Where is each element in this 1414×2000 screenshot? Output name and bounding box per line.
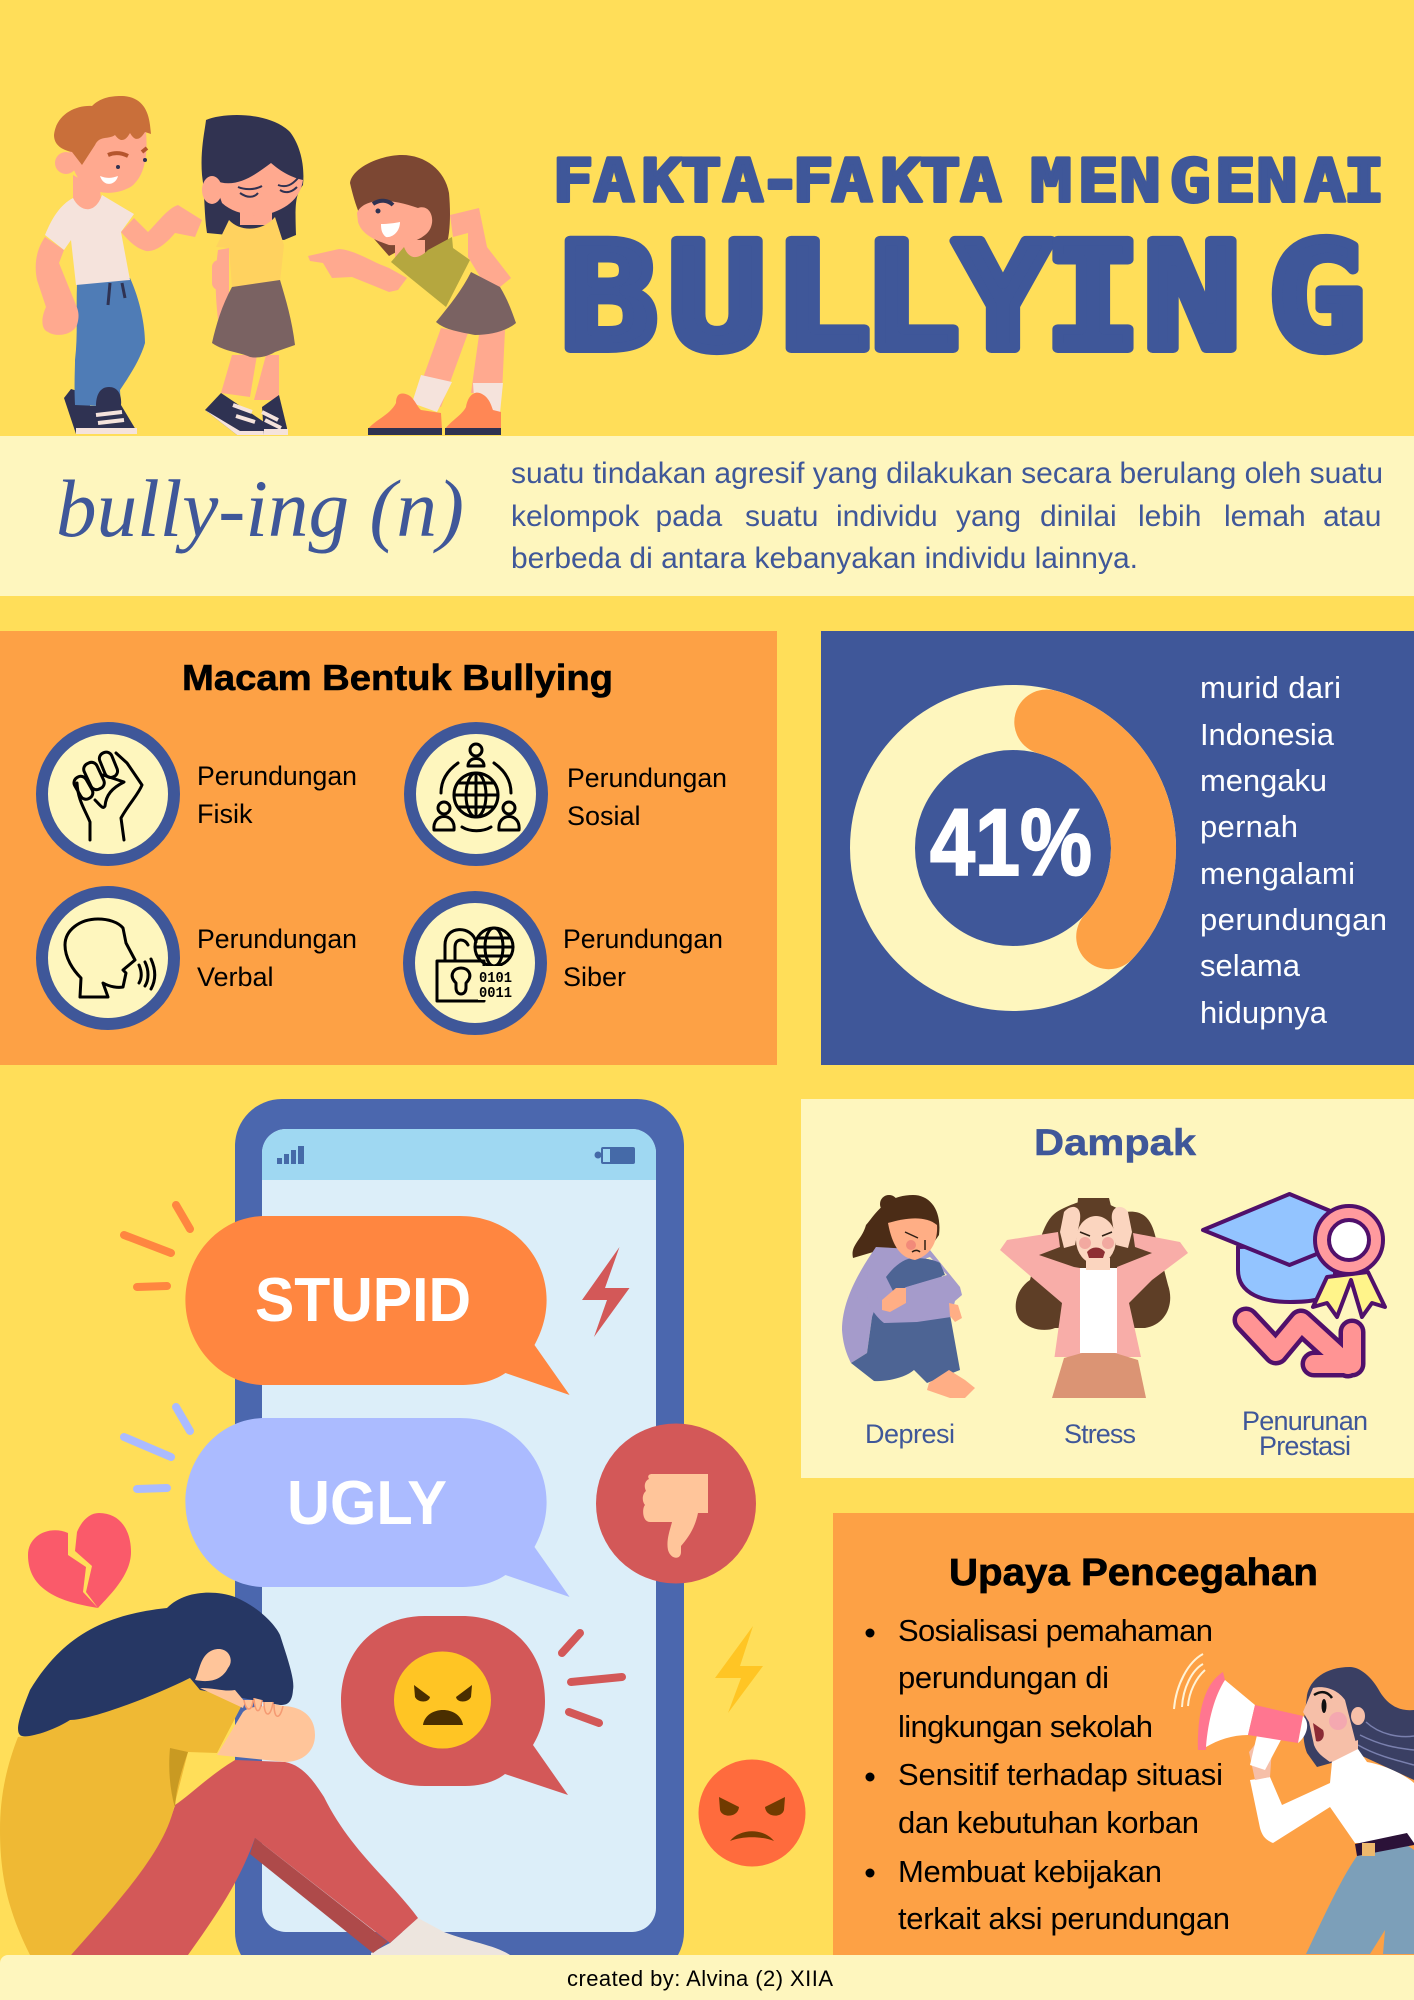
label: perundungan siber: Perundungan (563, 924, 723, 954)
heading: Dampak (1034, 1122, 1196, 1163)
label: perundungan fisik (197, 761, 357, 829)
definition text: individu (836, 500, 938, 533)
value: 41% (930, 790, 1092, 896)
panel: definition band (0, 436, 1414, 596)
bullet list: Sosialisasi pemahaman (898, 1613, 1213, 1648)
heading: Macam Bentuk Bullying (182, 657, 613, 698)
definition text (511, 457, 1383, 575)
speech bubble: angry emoji (341, 1616, 568, 1795)
definition text: lebih (1138, 500, 1201, 533)
label: perundungan verbal: Perundungan (197, 924, 357, 954)
definition text: suatu tindakan agresif yang dilakukan secara berulang oleh suatu (511, 457, 1383, 490)
label: penurunan prestasi: Prestasi (1259, 1431, 1351, 1461)
label: penurunan prestasi: Penurunan (1242, 1406, 1368, 1436)
statistic description: mengalami (1200, 856, 1355, 891)
statistic description: Indonesia (1200, 717, 1335, 752)
bullet list (866, 1613, 1230, 1936)
definition text: yang (956, 500, 1021, 533)
icon: speaking head (42, 892, 174, 1024)
statistic description: mengaku (1200, 763, 1327, 798)
figure: sad girl with dark hair (202, 115, 303, 435)
icon: lock and binary: 0011 (479, 985, 512, 1002)
definition text: pada (656, 500, 723, 533)
statistic description (1200, 670, 1387, 1030)
icon: yellow lightning (715, 1626, 763, 1713)
footer band (0, 1955, 1414, 2000)
icon: lock and binary (409, 897, 541, 1029)
label: perundungan verbal (197, 924, 357, 992)
bullet list: Sensitif terhadap situasi (898, 1757, 1223, 1792)
label: depresi: Depresi (865, 1419, 955, 1449)
statistic description: pernah (1200, 809, 1298, 844)
donut chart (882, 718, 1144, 978)
label: penurunan prestasi (1242, 1406, 1368, 1461)
statistic description: murid dari (1200, 670, 1341, 705)
label: perundungan siber (563, 924, 723, 992)
label: perundungan verbal: Verbal (197, 962, 274, 992)
icon: angry orange face (698, 1760, 806, 1866)
definition text: atau (1323, 500, 1381, 533)
definition text: suatu (745, 500, 818, 533)
definition text: kelompok (511, 500, 640, 533)
label: stress: Stress (1064, 1419, 1136, 1449)
bullet list: Membuat kebijakan (898, 1854, 1162, 1889)
bullet list: lingkungan sekolah (898, 1709, 1153, 1744)
icon: broken heart (28, 1513, 131, 1608)
label: perundungan sosial: Sosial (567, 801, 641, 831)
definition text: dinilai (1040, 500, 1117, 533)
statistic description: perundungan (1200, 902, 1387, 937)
bullet list: terkait aksi perundungan (898, 1901, 1230, 1936)
bullet list: dan kebutuhan korban (898, 1805, 1199, 1840)
speech bubble: ugly (185, 1418, 570, 1597)
label: perundungan fisik: Fisik (197, 799, 253, 829)
panel: macam bentuk bullying (0, 631, 777, 1065)
panel: upaya pencegahan (833, 1513, 1414, 1955)
bullet list: perundungan di (898, 1660, 1109, 1695)
definition text: berbeda di antara kebanyakan individu lainnya. (511, 542, 1138, 575)
spark lines (124, 1205, 622, 1723)
icon: red lightning (582, 1247, 630, 1337)
icon: thumbs down (596, 1424, 756, 1584)
icon: fist (42, 728, 174, 860)
illustration: girl with megaphone (1174, 1654, 1414, 1954)
title: bullying: BULLYING (560, 213, 1365, 383)
label: perundungan sosial (567, 763, 727, 831)
label: perundungan fisik: Perundungan (197, 761, 357, 791)
definition text: lemah (1224, 500, 1306, 533)
speech bubble: stupid (185, 1216, 570, 1395)
illustration: phone with hateful messages (0, 1099, 806, 1979)
figure: sad sitting girl (0, 1593, 510, 1955)
label: perundungan siber: Siber (563, 962, 626, 992)
statistic description: hidupnya (1200, 995, 1328, 1030)
panel: statistic 41% (821, 631, 1414, 1065)
speech bubble: ugly: UGLY (287, 1469, 447, 1538)
credit: created by: Alvina (2) XIIA (567, 1966, 833, 1991)
illustration: stressed girl (1000, 1198, 1188, 1398)
statistic description: selama (1200, 948, 1301, 983)
figure: boy pointing (36, 96, 202, 434)
illustration: depressed girl (842, 1195, 975, 1398)
heading: Upaya Pencegahan (949, 1552, 1318, 1594)
speech bubble: stupid: STUPID (255, 1266, 471, 1335)
phone body (235, 1099, 684, 1979)
figure: laughing girl pointing (308, 155, 516, 435)
label: perundungan sosial: Perundungan (567, 763, 727, 793)
illustration: three children bullying scene (36, 96, 516, 435)
icon: lock and binary: 0101 (479, 970, 512, 987)
title: fakta-fakta mengenai: FAKTA-FAKTA MENGENAI (552, 147, 1385, 216)
icon: graduation cap and falling arrow (1203, 1194, 1385, 1365)
panel: dampak (801, 1099, 1414, 1478)
icon: social network (410, 728, 542, 860)
word: bully-ing (n): bully-ing (n) (56, 463, 464, 554)
